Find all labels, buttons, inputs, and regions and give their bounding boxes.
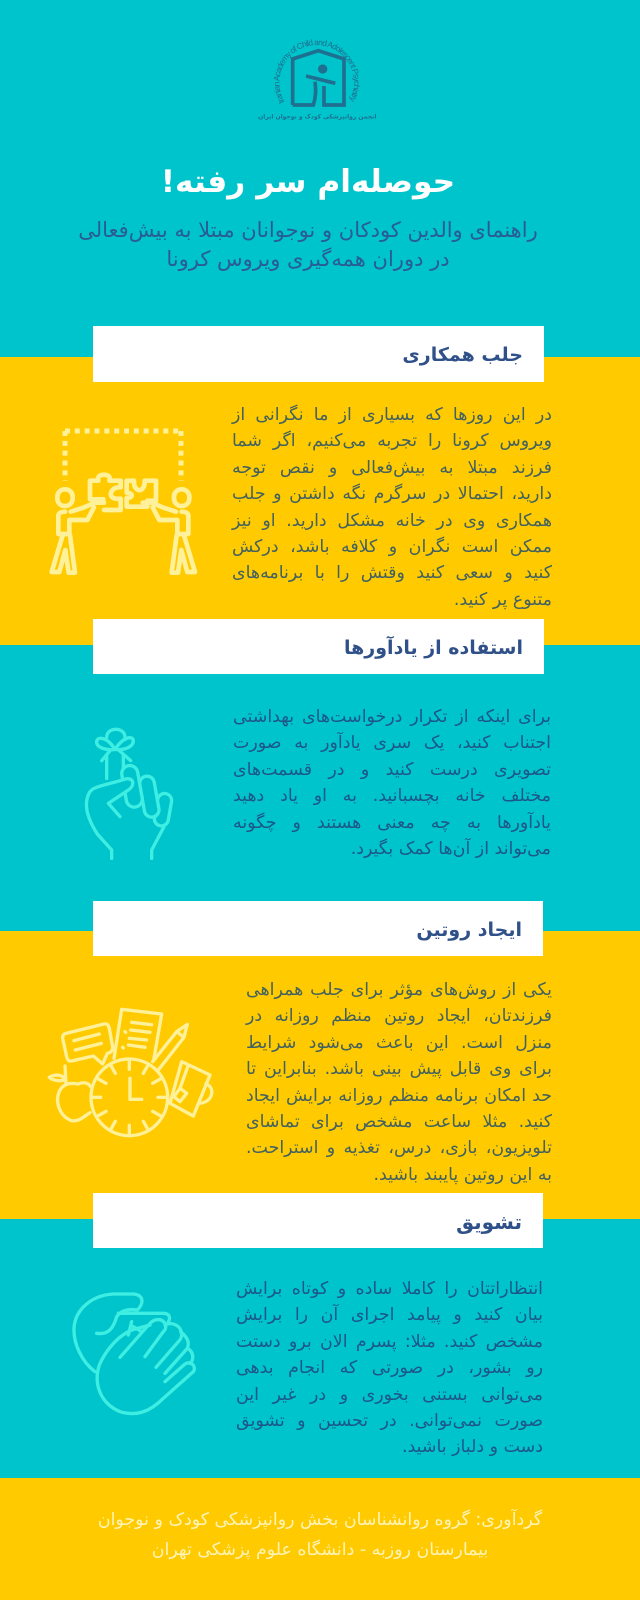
panel: جلب همکاری — [49, 326, 552, 610]
title: حوصله‌ام سر رفته! — [161, 164, 455, 200]
body text: ویروس کرونا را تجربه می‌کنیم، اگر شما — [232, 431, 552, 451]
body text — [236, 1279, 543, 1457]
panel: ایجاد روتین — [48, 901, 552, 1185]
logo: Iranian Academy of Child and Adolescent Psychiatry: انجمن روانپزشکی کودک و نوجوان ایران — [258, 113, 377, 121]
subtitle — [78, 218, 538, 271]
body text — [231, 404, 552, 610]
body text: دارید، احتمالا در سرگرم نگه داشتن و جلب — [232, 484, 552, 504]
logo: Iranian Academy of Child and Adolescent Psychiatry — [258, 39, 377, 121]
footer credit: بیمارستان روزبه - دانشگاه علوم پزشکی تهران — [152, 1540, 488, 1560]
body text: کنید و سعی کنید وقتش را با برنامه‌های — [232, 563, 552, 583]
subtitle: راهنمای والدین کودکان و نوجوانان مبتلا به بیش‌فعالی — [78, 218, 538, 242]
body text: صورت نمی‌توانی. در تحسین و تشویق — [236, 1411, 543, 1431]
panel: تشویق — [72, 1193, 543, 1457]
logo: Iranian Academy of Child and Adolescent Psychiatry: Iranian Academy of Child and Adolescent Psychiatry — [274, 39, 360, 104]
body text: ممکن است نگران و کلافه باشد، درکش — [232, 537, 552, 557]
body text: تصویری درست کنید و در قسمت‌های — [233, 760, 551, 780]
body text — [233, 707, 551, 859]
body text: متنوع پر کنید. — [454, 590, 552, 610]
heading — [93, 326, 544, 382]
body text: انتظاراتتان را کاملا ساده و کوتاه برایش — [236, 1279, 543, 1299]
body text: منزل است. این باعث می‌شود شرایط — [246, 1033, 552, 1053]
heading — [93, 901, 543, 956]
body text: یکی از روش‌های مؤثر برای جلب همراهی — [246, 980, 552, 1000]
icon: two people joining puzzle pieces — [49, 428, 198, 575]
footer credit — [98, 1508, 542, 1560]
heading: استفاده از یادآورها — [344, 637, 523, 659]
icon: clock with daily items — [48, 1008, 214, 1138]
body text: فرزند مبتلا به بیش‌فعالی و نقص توجه — [232, 458, 552, 478]
body text: مختلف خانه بچسبانید. به او یاد دهید — [233, 786, 551, 806]
body text: همکاری وی در خانه مشکل دارید. او نیز — [232, 511, 552, 531]
heading: جلب همکاری — [402, 344, 523, 366]
body text: تلویزیون، بازی، درس، تغذیه و استراحت. — [246, 1138, 552, 1158]
body text — [245, 980, 552, 1185]
icon: clapping hands — [72, 1292, 196, 1416]
icon: hand with ribbon on finger — [84, 728, 174, 860]
footer credit: گردآوری: گروه روانشناسان بخش روانپزشکی کودک و نوجوان — [98, 1510, 542, 1530]
heading: ایجاد روتین — [416, 919, 522, 941]
body text: به این روتین پایبند باشید. — [373, 1165, 552, 1185]
heading: تشویق — [456, 1210, 522, 1234]
heading — [93, 1193, 543, 1248]
subtitle: در دوران همه‌گیری ویروس کرونا — [166, 247, 450, 271]
body text: می‌توانی بستنی بخوری و در غیر این — [236, 1385, 543, 1405]
body text: در این روزها که بسیاری از ما نگرانی از — [232, 405, 552, 425]
heading — [93, 619, 544, 674]
body text: رو بشور، در صورتی که انجام بدهی — [236, 1358, 543, 1378]
body text: حد امکان برنامه منظم روزانه برایش ایجاد — [246, 1086, 552, 1106]
body text: کنید. مثلا ساعت مشخص برای تماشای — [246, 1112, 552, 1132]
body text: می‌تواند از آن‌ها کمک بگیرد. — [351, 839, 551, 859]
body text: اجتناب کنید، یک سری یادآور به صورت — [233, 733, 551, 753]
body text: برای وی قابل پیش بینی باشد. بنابراین تا — [246, 1059, 552, 1079]
body text: برای اینکه از تکرار درخواست‌های بهداشتی — [233, 707, 551, 727]
body text: فرزندتان، ایجاد روتین منظم روزانه در — [246, 1006, 552, 1026]
body text: دست و دلباز باشید. — [402, 1437, 543, 1457]
body text: مشخص کنید. مثلا: پسرم الان برو دستت — [236, 1332, 543, 1352]
body text: بیان کنید و پیامد اجرای آن را برایش — [236, 1305, 543, 1325]
panel: استفاده از یادآورها — [84, 619, 551, 860]
body text: یادآورها به چه معنی هستند و چگونه — [233, 813, 551, 833]
